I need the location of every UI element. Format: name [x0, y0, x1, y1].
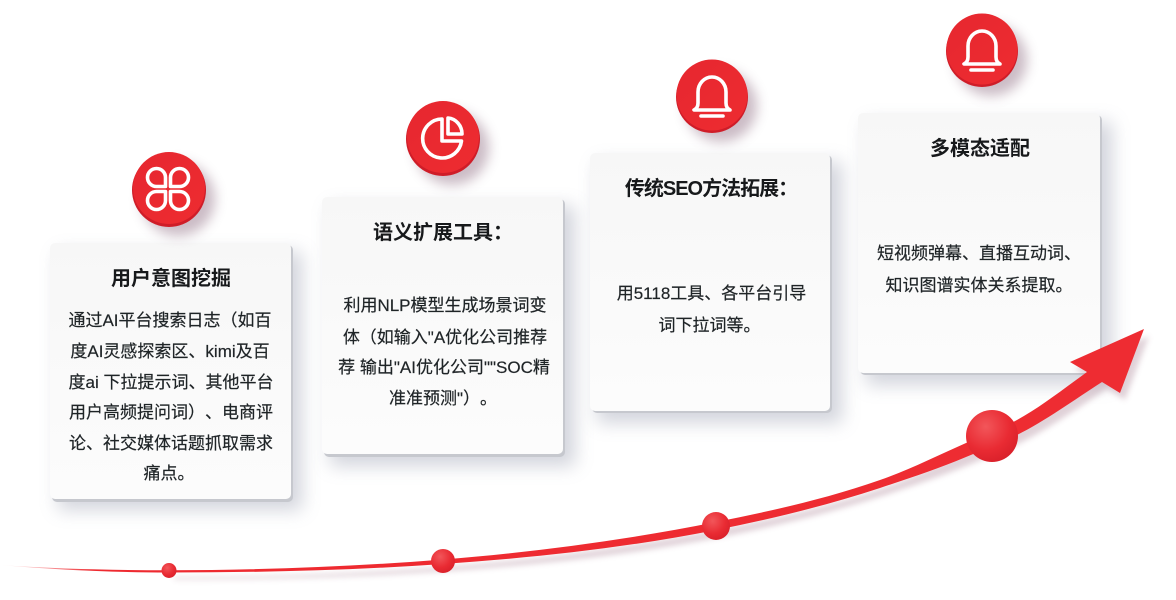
body text: card 4: 短视频弹幕、直播互动词、 [877, 244, 1081, 263]
card 4: 多模态适配 [858, 113, 1112, 385]
milestone dot 3 [702, 512, 730, 540]
card 2: 语义扩展工具 [322, 197, 575, 466]
heading: 多模态适配: 多模态适配 [930, 136, 1030, 160]
icon: bell [676, 60, 757, 142]
icon: bell 2 [946, 14, 1027, 96]
card 1: 用户意图挖掘 [50, 243, 302, 510]
icon: pie chart [406, 101, 489, 185]
body text: card 3: 用5118工具、各平台引导 [617, 284, 806, 303]
milestone dot 2 [431, 549, 455, 573]
body text: card 1: 痛点。 [144, 464, 194, 483]
body text: card 1 [68, 311, 273, 483]
card 3: 传统SEO方法拓展 [590, 153, 842, 423]
icon: four petals [132, 152, 215, 236]
milestone dot 1 [162, 563, 176, 578]
milestone dot 4 [966, 410, 1018, 462]
body text: card 1: 论、社交媒体话题抓取需求 [69, 434, 273, 453]
body text: card 2: 利用NLP模型生成场景词变 [343, 296, 547, 315]
body text: card 1: 度ai 下拉提示词、其他平台 [69, 373, 273, 392]
heading: 用户意图挖掘: 用户意图挖掘 [111, 266, 231, 290]
body text: card 4 [877, 244, 1081, 295]
body text: card 2 [338, 296, 550, 408]
heading: 语义扩展工具: 语义扩展工具： [373, 221, 513, 244]
body text: card 4: 知识图谱实体关系提取。 [886, 276, 1072, 295]
body text: card 2: 准准预测"）。 [389, 389, 497, 408]
body text: card 2: 体（如输入"A优化公司推荐 [343, 328, 547, 347]
body text: card 2: 荐 输出"AI优化公司""SOC精 [338, 358, 550, 377]
body text: card 1: 通过AI平台搜索日志（如百 [68, 311, 272, 330]
body text: card 3: 词下拉词等。 [658, 316, 760, 335]
growth arrow [0, 329, 1149, 580]
heading: 传统SEO方法拓展: 传统SEO方法拓展： [625, 176, 797, 200]
body text: card 1: 度AI灵感探索区、kimi及百 [70, 342, 270, 361]
body text: card 3 [617, 284, 806, 335]
body text: card 1: 用户高频提问词）、电商评 [69, 403, 273, 422]
